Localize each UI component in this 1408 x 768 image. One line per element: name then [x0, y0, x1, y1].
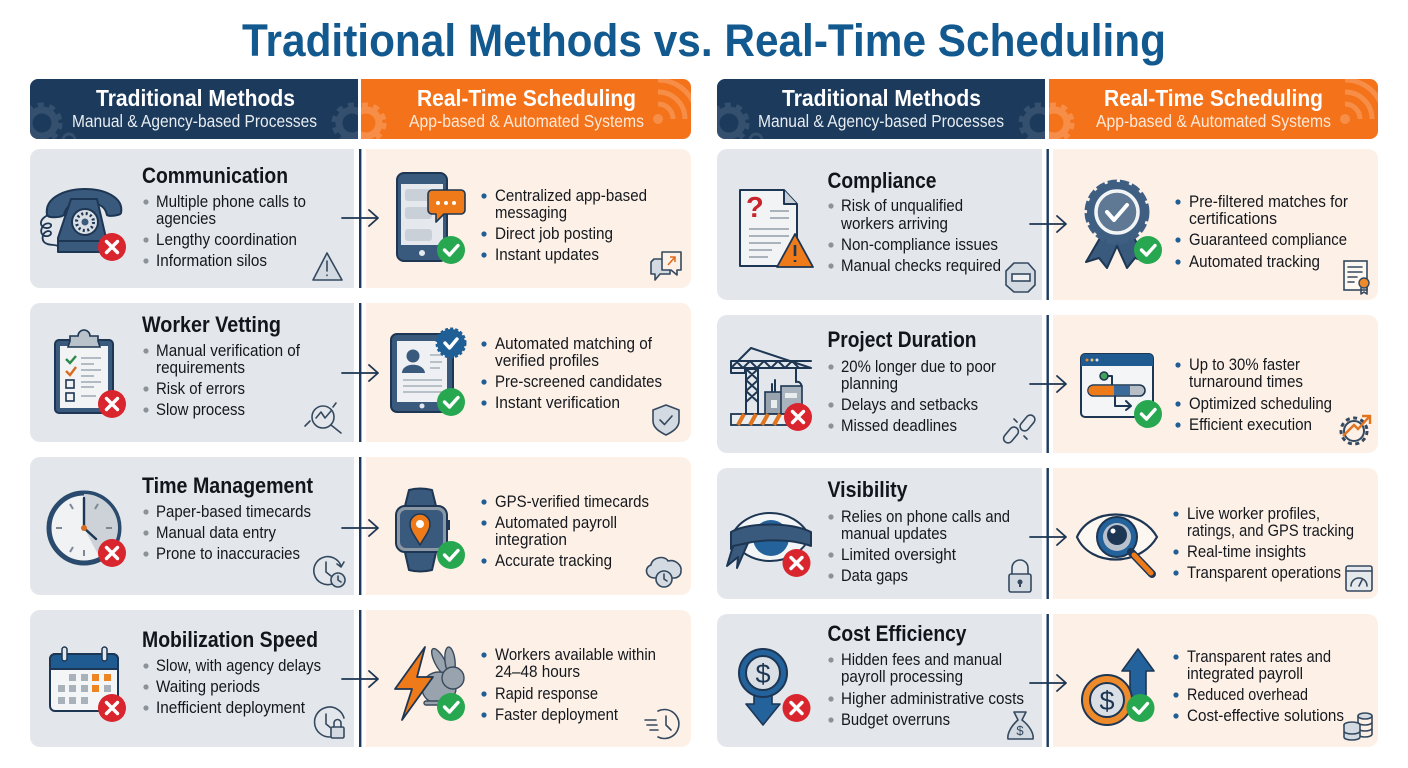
- divider: [1046, 149, 1049, 300]
- icon: coin with up arrow: $: [1099, 686, 1115, 716]
- bullet list: traditional: [828, 507, 1010, 585]
- heading: Project Duration: [828, 327, 976, 352]
- icon: dashboard gauge: [1346, 566, 1372, 591]
- bullet list: real-time: [481, 645, 656, 724]
- row: compliance: [717, 149, 1378, 300]
- bullet list: real-time: Pre-filtered matches for: [1189, 192, 1348, 211]
- panel: project duration traditional: [717, 315, 1042, 453]
- panel: worker vetting traditional: [30, 303, 354, 442]
- bullet list: traditional: Hidden fees and manual: [841, 650, 1002, 669]
- icon: gear with rising arrow: [1341, 416, 1370, 444]
- bullet list: real-time: [1175, 355, 1332, 434]
- bullet list: real-time: Instant updates: [495, 245, 599, 264]
- bullet list: traditional: [143, 341, 300, 419]
- divider: [359, 457, 361, 595]
- bullet list: real-time: Workers available within: [495, 645, 656, 664]
- icon: padlock: [1009, 560, 1031, 592]
- badge: red cross: [98, 694, 126, 722]
- bullet list: traditional: [828, 650, 1024, 729]
- bullet list: traditional: [828, 196, 1001, 275]
- icon: rabbit with lightning bolt: [395, 646, 464, 720]
- heading: Communication: [142, 163, 288, 188]
- icon: blindfolded eye: [727, 513, 811, 568]
- bullet list: real-time: Up to 30% faster: [1189, 355, 1300, 374]
- icon: phone with chat bubble: [397, 173, 465, 261]
- bullet list: traditional: Slow, with agency delays: [156, 656, 321, 675]
- header: traditional methods, left column: Traditional Methods: [96, 85, 295, 111]
- icon: eye with magnifier: [1077, 514, 1157, 574]
- bullet list: real-time: Automated payroll: [495, 513, 617, 532]
- bullet list: real-time: Efficient execution: [1189, 415, 1312, 434]
- arrow: [1030, 675, 1066, 691]
- bullet list: real-time: Instant verification: [495, 393, 620, 412]
- bullet list: real-time: Real-time insights: [1187, 542, 1306, 561]
- bullet list: real-time: 24–48 hours: [495, 662, 580, 681]
- icon: fast clock: [645, 710, 679, 738]
- bullet list: traditional: [828, 357, 996, 435]
- bullet list: traditional: [143, 502, 311, 563]
- bullet list: traditional: Slow process: [156, 400, 245, 419]
- bullet list: real-time: Faster deployment: [495, 705, 618, 724]
- badge: red cross: [782, 549, 810, 577]
- row: visibility: [717, 468, 1378, 599]
- arrow: [342, 365, 378, 381]
- panel: communication real-time: [366, 149, 691, 288]
- bullet list: traditional: Information silos: [156, 251, 267, 270]
- header: traditional methods, right column: Traditional Methods: [782, 85, 981, 111]
- bullet list: traditional: 20% longer due to poor: [841, 357, 996, 376]
- row: mobilization speed: [30, 610, 691, 747]
- badge: green check: [437, 541, 465, 569]
- bullet list: traditional: Manual data entry: [156, 523, 276, 542]
- divider: [359, 149, 361, 288]
- bullet list: real-time: Automated matching of: [495, 334, 652, 353]
- bullet list: real-time: Rapid response: [495, 684, 598, 703]
- bullet list: real-time: Transparent rates and: [1187, 647, 1331, 666]
- bullet list: real-time: Automated tracking: [1189, 252, 1320, 271]
- row: worker vetting: [30, 303, 691, 442]
- bullet list: traditional: Risk of errors: [156, 379, 245, 398]
- panel: time management traditional: [30, 457, 354, 595]
- bullet list: traditional: Inefficient deployment: [156, 698, 305, 717]
- icon: coin with up arrow: [1082, 649, 1154, 725]
- badge: red cross: [784, 403, 812, 431]
- bullet list: traditional: [143, 656, 321, 717]
- icon: shield check: [653, 405, 679, 435]
- arrow: [342, 520, 378, 536]
- bullet list: real-time: Centralized app-based: [495, 186, 647, 205]
- bullet list: traditional: Lengthy coordination: [156, 230, 297, 249]
- icon: calendar: [50, 647, 118, 711]
- icon: chat with arrow: [651, 252, 681, 280]
- header: traditional methods, left column: [30, 79, 358, 139]
- panel: cost efficiency real-time: [1053, 614, 1378, 747]
- bullet list: traditional: Multiple phone calls to: [156, 192, 306, 211]
- panel: worker vetting real-time: [366, 303, 691, 442]
- bullet list: real-time: Pre-screened candidates: [495, 372, 662, 391]
- icon: warning triangle: [313, 253, 342, 280]
- divider: [359, 303, 361, 442]
- bullet list: real-time: turnaround times: [1189, 372, 1303, 391]
- bullet list: real-time: Cost-effective solutions: [1187, 706, 1344, 725]
- header: real-time scheduling, left column: Real-Time Scheduling: [417, 85, 636, 111]
- divider: [1046, 468, 1049, 599]
- arrow: [1030, 529, 1066, 545]
- icon: construction crane: [731, 348, 811, 425]
- bullet list: traditional: requirements: [156, 358, 245, 377]
- heading: Visibility: [828, 477, 908, 502]
- icon: award rosette: [1086, 182, 1148, 268]
- icon: wall clock: [49, 493, 119, 563]
- bullet list: real-time: Reduced overhead: [1187, 685, 1308, 704]
- bullet list: real-time: [481, 186, 647, 264]
- badge: green check: [437, 388, 465, 416]
- badge: red cross: [782, 694, 810, 722]
- badge: green check: [1134, 400, 1162, 428]
- heading: Cost Efficiency: [828, 621, 967, 646]
- panel: mobilization speed traditional: [30, 610, 354, 747]
- bullet list: traditional: manual updates: [841, 524, 947, 543]
- bullet list: real-time: [1175, 192, 1348, 271]
- badge: green check: [437, 693, 465, 721]
- panel: compliance traditional: [717, 149, 1042, 300]
- panel: mobilization speed real-time: [366, 610, 691, 747]
- icon: coin with down arrow: $: [755, 659, 771, 689]
- bullet list: traditional: agencies: [156, 209, 216, 228]
- arrow: [342, 210, 378, 226]
- row: time management: [30, 457, 691, 595]
- bullet list: real-time: integrated payroll: [1187, 664, 1303, 683]
- bullet list: real-time: [1173, 504, 1354, 582]
- bullet list: traditional: Risk of unqualified: [841, 196, 963, 215]
- badge: red cross: [98, 390, 126, 418]
- bullet list: real-time: messaging: [495, 203, 567, 222]
- arrow: [1030, 216, 1066, 232]
- row: cost efficiency: [717, 614, 1378, 747]
- badge: red cross: [98, 233, 126, 261]
- icon: coin stacks: [1344, 713, 1372, 740]
- icon: magnifier with trend: [305, 403, 341, 433]
- heading: Worker Vetting: [142, 312, 281, 337]
- divider: [1046, 614, 1049, 747]
- icon: coin with down arrow: [739, 649, 787, 725]
- header: real-time scheduling, right column: App-based & Automated Systems: [1096, 111, 1331, 131]
- bullet list: real-time: [481, 492, 649, 570]
- icon: scheduling window: [1081, 354, 1153, 417]
- bullet list: traditional: Waiting periods: [156, 677, 260, 696]
- bullet list: traditional: Prone to inaccuracies: [156, 544, 300, 563]
- bullet list: real-time: Guaranteed compliance: [1189, 230, 1347, 249]
- bullet list: traditional: Paper-based timecards: [156, 502, 311, 521]
- bullet list: traditional: payroll processing: [841, 667, 963, 686]
- bullet list: traditional: Limited oversight: [841, 545, 956, 564]
- header: traditional methods, right column: [717, 79, 1045, 139]
- bullet list: real-time: Transparent operations: [1187, 563, 1341, 582]
- icon: smartwatch with pin: [396, 488, 450, 572]
- row: project duration: [717, 315, 1378, 453]
- panel: visibility traditional: [717, 468, 1042, 599]
- icon: money bag: [1008, 712, 1033, 739]
- icon: tablet profile with badge: [391, 329, 465, 412]
- icon: document with warning: ?: [746, 192, 764, 224]
- bullet list: real-time: Live worker profiles,: [1187, 504, 1320, 523]
- icon: cloud with clock: [646, 558, 681, 587]
- bullet list: traditional: Data gaps: [841, 566, 908, 585]
- bullet list: traditional: Missed deadlines: [841, 416, 957, 435]
- heading: Compliance: [828, 168, 936, 193]
- icon: document with warning: [740, 190, 813, 267]
- icon: clipboard checklist: [55, 330, 113, 413]
- divider: [1046, 315, 1049, 453]
- badge: green check: [1134, 236, 1162, 264]
- bullet list: traditional: planning: [841, 374, 898, 393]
- panel: project duration real-time: [1053, 315, 1378, 453]
- bullet list: real-time: Optimized scheduling: [1189, 394, 1332, 413]
- bullet list: real-time: Direct job posting: [495, 224, 613, 243]
- icon: money bag: $: [1016, 723, 1024, 738]
- bullet list: traditional: Manual verification of: [156, 341, 300, 360]
- divider: [359, 610, 361, 747]
- panel: communication traditional: [30, 149, 354, 288]
- icon: stop sign: [1006, 263, 1035, 292]
- icon: broken chain: [1002, 413, 1037, 445]
- row: communication: [30, 149, 691, 288]
- bullet list: traditional: workers arriving: [840, 214, 948, 233]
- bullet list: traditional: Higher administrative costs: [841, 689, 1024, 708]
- bullet list: real-time: Accurate tracking: [495, 551, 612, 570]
- badge: green check: [1126, 694, 1154, 722]
- bullet list: traditional: Non-compliance issues: [841, 235, 998, 254]
- header: traditional methods, right column: Manual & Agency-based Processes: [758, 111, 1004, 131]
- arrow: [1030, 376, 1066, 392]
- arrow: [342, 671, 378, 687]
- icon: certificate: [1344, 261, 1369, 294]
- heading: Time Management: [142, 473, 314, 498]
- bullet list: traditional: Manual checks required: [841, 256, 1001, 275]
- bullet list: traditional: Relies on phone calls and: [841, 507, 1010, 526]
- bullet list: real-time: ratings, and GPS tracking: [1187, 521, 1354, 540]
- bullet list: traditional: [143, 192, 306, 270]
- header: real-time scheduling, right column: Real-Time Scheduling: [1104, 85, 1323, 111]
- bullet list: real-time: [1173, 647, 1344, 725]
- badge: red cross: [98, 539, 126, 567]
- panel: visibility real-time: [1053, 468, 1378, 599]
- icon: clock with lock: [315, 707, 344, 738]
- bullet list: real-time: verified profiles: [495, 351, 599, 370]
- header: real-time scheduling, left column: App-based & Automated Systems: [409, 111, 644, 131]
- header: real-time scheduling, right column: [1036, 79, 1384, 141]
- title: Traditional Methods vs. Real-Time Scheduling: [242, 15, 1166, 66]
- bullet list: traditional: Delays and setbacks: [841, 395, 978, 414]
- header: traditional methods, left column: Manual & Agency-based Processes: [72, 111, 317, 131]
- icon: rotary telephone: [41, 189, 121, 252]
- panel: compliance real-time: [1053, 149, 1378, 300]
- bullet list: real-time: GPS-verified timecards: [495, 492, 649, 511]
- panel: cost efficiency traditional: [717, 614, 1042, 747]
- bullet list: real-time: [481, 334, 662, 412]
- bullet list: real-time: integration: [495, 530, 567, 549]
- icon: clock with arrow: [314, 557, 345, 587]
- bullet list: traditional: Budget overruns: [841, 710, 950, 729]
- panel: time management real-time: [366, 457, 691, 595]
- bullet list: real-time: certifications: [1189, 209, 1277, 228]
- header: real-time scheduling, left column: [348, 79, 697, 141]
- heading: Mobilization Speed: [142, 627, 318, 652]
- badge: green check: [437, 236, 465, 264]
